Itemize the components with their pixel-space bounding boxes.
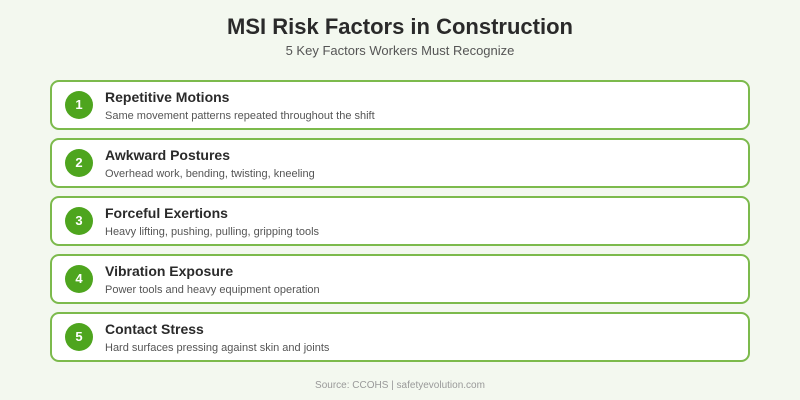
card: vibration exposure: 4 bbox=[75, 271, 83, 286]
card: forceful exertions: Heavy lifting, pushing, pulling, gripping tools bbox=[105, 226, 319, 238]
footer source: Source: CCOHS | safetyevolution.com bbox=[315, 380, 485, 391]
card: contact stress: Hard surfaces pressing against skin and joints bbox=[105, 342, 329, 354]
card: vibration exposure bbox=[50, 254, 750, 304]
card: forceful exertions: 3 bbox=[75, 213, 83, 228]
subtitle: 5 Key Factors Workers Must Recognize bbox=[286, 43, 514, 58]
card: forceful exertions bbox=[50, 196, 750, 246]
title: MSI Risk Factors in Construction bbox=[227, 14, 573, 39]
card: contact stress: Contact Stress bbox=[105, 321, 204, 337]
card: awkward postures: Overhead work, bending, twisting, kneeling bbox=[105, 168, 315, 180]
card: awkward postures bbox=[50, 138, 750, 188]
card: repetitive motions: Same movement patterns repeated throughout the shift bbox=[105, 110, 375, 122]
card: contact stress: 5 bbox=[75, 329, 83, 344]
card: awkward postures: 2 bbox=[75, 155, 83, 170]
card: vibration exposure: Vibration Exposure bbox=[105, 263, 233, 279]
card: contact stress bbox=[50, 312, 750, 362]
card: repetitive motions: Repetitive Motions bbox=[105, 89, 229, 105]
card: forceful exertions: Forceful Exertions bbox=[105, 205, 228, 221]
card: awkward postures: Awkward Postures bbox=[105, 147, 230, 163]
card: repetitive motions bbox=[50, 80, 750, 130]
card: vibration exposure: Power tools and heavy equipment operation bbox=[105, 284, 320, 296]
card: repetitive motions: 1 bbox=[75, 97, 83, 112]
